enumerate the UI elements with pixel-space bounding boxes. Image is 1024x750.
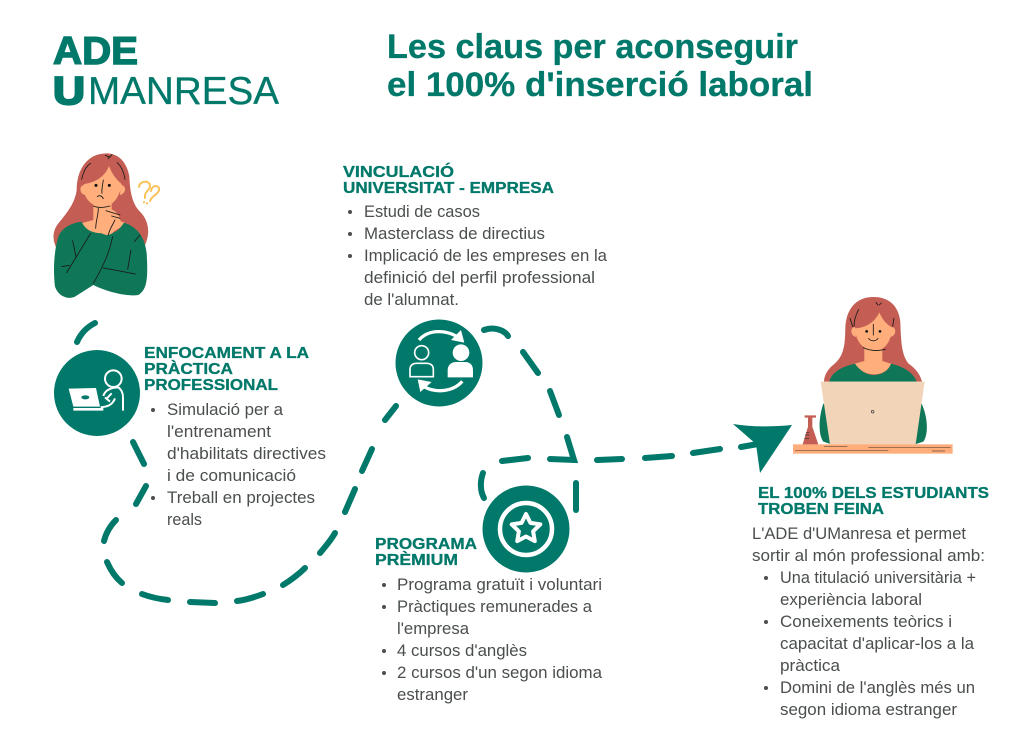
heading: PROFESSIONAL <box>144 377 278 394</box>
panel: el 100% <box>752 485 989 719</box>
intro and bullet list: pràctica <box>780 657 841 675</box>
icon: two people with arrows <box>410 330 473 392</box>
bullet list: Programa gratuït i voluntari <box>397 576 602 594</box>
table lines <box>795 447 951 451</box>
intro and bullet list: experiència laboral <box>780 591 922 609</box>
bullet list: Estudi de casos <box>364 203 480 221</box>
hair <box>54 153 148 252</box>
eyes <box>865 330 868 333</box>
panel: vinculació <box>343 162 608 309</box>
heading: PRÈMIUM <box>375 550 458 569</box>
heading: UNIVERSITAT - EMPRESA <box>343 180 554 197</box>
title: Les claus per aconseguir <box>387 28 798 66</box>
title <box>387 28 813 104</box>
icon: ring with star <box>500 503 552 555</box>
heading: PROGRAMA <box>375 536 477 553</box>
bullet list: estranger <box>397 686 469 704</box>
face lines <box>62 155 140 283</box>
illustration: happy woman at laptop <box>793 297 953 454</box>
bullet list: Pràctiques remunerades a <box>397 598 593 616</box>
sleeves <box>820 404 927 444</box>
bullet list: Masterclass de directius <box>364 225 545 243</box>
dashed path <box>77 323 758 603</box>
face <box>84 166 122 207</box>
bullet list: d'habilitats directives <box>167 445 326 463</box>
bullet list: de l'alumnat. <box>364 291 459 309</box>
bullet list: reals <box>167 511 202 529</box>
bullet list <box>382 576 603 704</box>
icon: laptop and person <box>69 370 123 411</box>
table <box>793 444 953 454</box>
panel: enfocament <box>144 345 326 529</box>
icon circle: university-company exchange <box>396 320 482 406</box>
intro and bullet list: L'ADE d'UManresa et permet <box>752 525 966 543</box>
intro and bullet list: Domini de l'anglès més un <box>780 679 975 697</box>
heading <box>375 536 477 569</box>
logo: ADE UManresa: MANRESA <box>88 70 279 113</box>
ears <box>851 327 895 337</box>
laptop <box>821 382 925 444</box>
hand <box>96 207 121 235</box>
heading: PRÀCTICA <box>144 359 233 378</box>
bullet list: i de comunicació <box>167 467 296 485</box>
bullet list: l'entrenament <box>167 423 271 441</box>
logo: ADE UManresa: ADE <box>53 30 138 73</box>
intro and bullet list: Coneixements teòrics i <box>780 613 952 631</box>
logo: ADE UManresa: U <box>53 70 85 113</box>
intro and bullet list: Una titulació universitària + <box>780 569 976 587</box>
sweater <box>54 222 147 298</box>
heading: VINCULACIÓ <box>343 162 454 181</box>
bullet list: definició del perfil professional <box>364 269 595 287</box>
icon: question marks <box>139 182 159 204</box>
sweater <box>829 364 917 382</box>
eyes <box>94 184 97 187</box>
heading <box>343 162 554 197</box>
intro and bullet list: segon idioma estranger <box>780 701 958 719</box>
heading: EL 100% DELS ESTUDIANTS <box>758 485 989 502</box>
icon circle: premium star <box>482 486 570 572</box>
intro and bullet list: sortir al món professional amb: <box>752 547 985 565</box>
neck <box>864 345 882 364</box>
intro and bullet list <box>752 525 985 719</box>
bullet list: l'empresa <box>397 620 470 638</box>
bullet list: Implicació de les empreses en la <box>364 247 608 265</box>
arrow head <box>733 424 792 473</box>
neck and chest <box>81 202 125 233</box>
chest <box>855 361 891 374</box>
title: el 100% d'inserció laboral <box>387 66 813 104</box>
illustration: thinking woman <box>54 153 148 298</box>
hair <box>824 297 922 382</box>
bullet list: 4 cursos d'anglès <box>397 642 527 660</box>
heading: TROBEN FEINA <box>758 501 884 518</box>
icon: star <box>512 514 540 541</box>
bullet list: Treball en projectes <box>167 489 315 507</box>
bullet list <box>151 401 326 529</box>
heading: ENFOCAMENT A LA <box>144 345 309 362</box>
face lines <box>850 302 894 350</box>
intro and bullet list: capacitat d'aplicar-los a la <box>780 635 975 653</box>
bullet list <box>348 203 608 309</box>
logo: ADE UManresa <box>53 30 279 113</box>
bullet list: 2 cursos d'un segon idioma <box>397 664 603 682</box>
face <box>855 312 892 351</box>
bullet list: Simulació per a <box>167 401 284 419</box>
ears <box>80 185 125 195</box>
heading <box>144 345 309 394</box>
heading <box>758 485 989 518</box>
laptop logo <box>871 410 874 413</box>
panel: programa prèmium <box>375 536 603 704</box>
vase <box>803 415 818 444</box>
icon circle: practice laptop <box>54 350 140 436</box>
